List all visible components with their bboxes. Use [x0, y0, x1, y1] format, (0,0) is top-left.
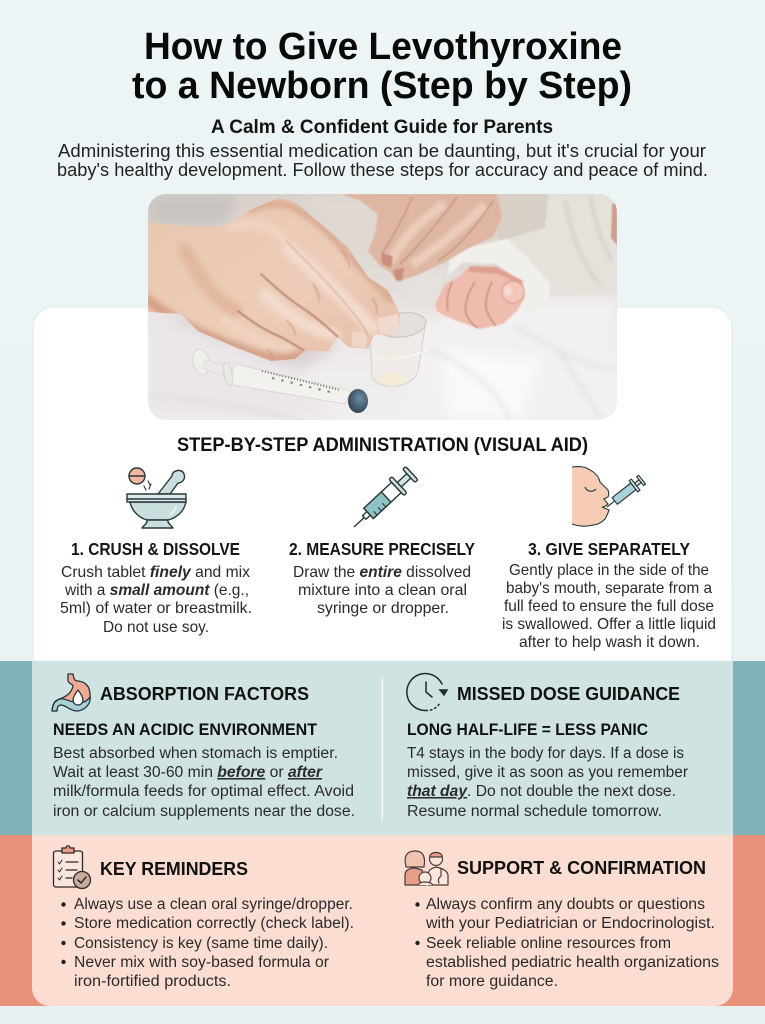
panel: key reminders: KEY REMINDERS [100, 858, 248, 879]
bullet list: Always confirm any doubts or questions [426, 896, 705, 913]
step 1: crush and dissolve: 1. CRUSH & DISSOLVE [71, 539, 240, 559]
step 3: give separately: is swallowed. Offer a little liquid [502, 616, 716, 633]
adult hand [148, 194, 408, 364]
bullet list: Consistency is key (same time daily). [74, 935, 328, 952]
section heading: steps: STEP-BY-STEP ADMINISTRATION (VISUAL AID) [177, 434, 588, 456]
background behind sleeve [498, 212, 545, 239]
panel: missed dose guidance: T4 stays in the body for days. If a dose is [407, 745, 684, 762]
step 3: give separately: 3. GIVE SEPARATELY [528, 539, 690, 559]
coral band [0, 835, 765, 1006]
title: to a Newborn (Step by Step) [132, 65, 632, 107]
panel: missed dose guidance: LONG HALF-LIFE = LESS PANIC [407, 720, 648, 739]
icon: family and doctor [405, 851, 448, 885]
step 2: measure precisely [289, 465, 475, 617]
step 3: give separately: Gently place in the side of the [509, 562, 709, 579]
bullet list: Never mix with soy-based formula or [74, 954, 329, 971]
title [132, 26, 632, 107]
teal band [0, 661, 765, 835]
panel: absorption factors: iron or calcium supplements near the dose. [53, 803, 355, 820]
icon: mortar and pestle [127, 468, 186, 528]
syringe [190, 348, 368, 413]
intro text: Administering this essential medication can be daunting, but it's crucial for your [58, 140, 706, 161]
panel: missed dose guidance [407, 674, 688, 820]
panel: absorption factors: milk/formula feeds for optimal effect. Avoid [53, 783, 354, 800]
step 1: crush and dissolve: Crush tablet finely and mix [61, 564, 250, 581]
bullet list: Seek reliable online resources from [426, 935, 671, 952]
step 1: crush and dissolve: with a small amount (e.g., [64, 582, 249, 599]
panel: missed dose guidance: MISSED DOSE GUIDANCE [457, 683, 680, 704]
icon: stomach [52, 674, 90, 711]
step 3: give separately: after to help wash it down. [519, 634, 700, 651]
panel: key reminders [54, 846, 354, 990]
step 3: give separately: baby's mouth, separate from a [506, 580, 712, 597]
step 2: measure precisely: syringe or dropper. [317, 600, 449, 617]
bullet list: for more guidance. [426, 973, 558, 990]
step 3: give separately: full feed to ensure the full dose [504, 598, 714, 615]
panel: absorption factors: Wait at least 30-60 min before or after [53, 764, 323, 781]
icon: clock [407, 674, 447, 711]
photo: hands, measuring cup and syringe [148, 194, 617, 420]
panel: absorption factors [52, 674, 355, 820]
panel: support and confirmation [405, 851, 719, 990]
title: How to Give Levothyroxine [144, 26, 622, 68]
sleeve [448, 194, 617, 298]
intro text [57, 140, 708, 180]
intro text: baby's healthy development. Follow these steps for accuracy and peace of mind. [57, 159, 708, 180]
panel: support and confirmation: SUPPORT & CONFIRMATION [457, 857, 706, 878]
icon: clipboard checklist [54, 846, 90, 888]
heading: ABSORPTION FACTORS [100, 683, 309, 704]
panel: missed dose guidance: missed, give it as soon as you remember [407, 764, 688, 781]
panel: missed dose guidance: that day. Do not double the next dose. [407, 783, 676, 800]
bullet list: Store medication correctly (check label). [74, 915, 354, 932]
step 1: crush and dissolve: 5ml) of water or breastmilk. [60, 600, 252, 617]
panel: absorption factors: Best absorbed when stomach is emptier. [53, 745, 338, 762]
panel: missed dose guidance: Resume normal schedule tomorrow. [407, 803, 662, 820]
icon: syringe [346, 465, 419, 535]
step 2: measure precisely: 2. MEASURE PRECISELY [289, 539, 475, 559]
subtitle: A Calm & Confident Guide for Parents [211, 116, 553, 138]
second adult hand [341, 194, 502, 282]
bullet list: established pediatric health organizations [426, 954, 719, 971]
measuring cup [370, 310, 427, 386]
icon: baby face with syringe [572, 467, 646, 526]
step 1: crush and dissolve [60, 468, 252, 636]
baby hand [435, 266, 525, 329]
bullet list: with your Pediatrician or Endocrinologist. [425, 915, 715, 932]
panel: white steps card [33, 307, 732, 661]
bullet list [415, 896, 719, 990]
step 3: give separately [502, 467, 716, 651]
bullet list: Always use a clean oral syringe/dropper. [74, 896, 353, 913]
step 2: measure precisely: Draw the entire dissolved [293, 564, 471, 581]
bullet list: iron-fortified products. [74, 973, 231, 990]
panel: absorption factors: NEEDS AN ACIDIC ENVIRONMENT [53, 720, 318, 739]
bullet list [61, 896, 354, 990]
step 2: measure precisely: mixture into a clean oral [298, 582, 467, 599]
step 1: crush and dissolve: Do not use soy. [103, 619, 209, 636]
